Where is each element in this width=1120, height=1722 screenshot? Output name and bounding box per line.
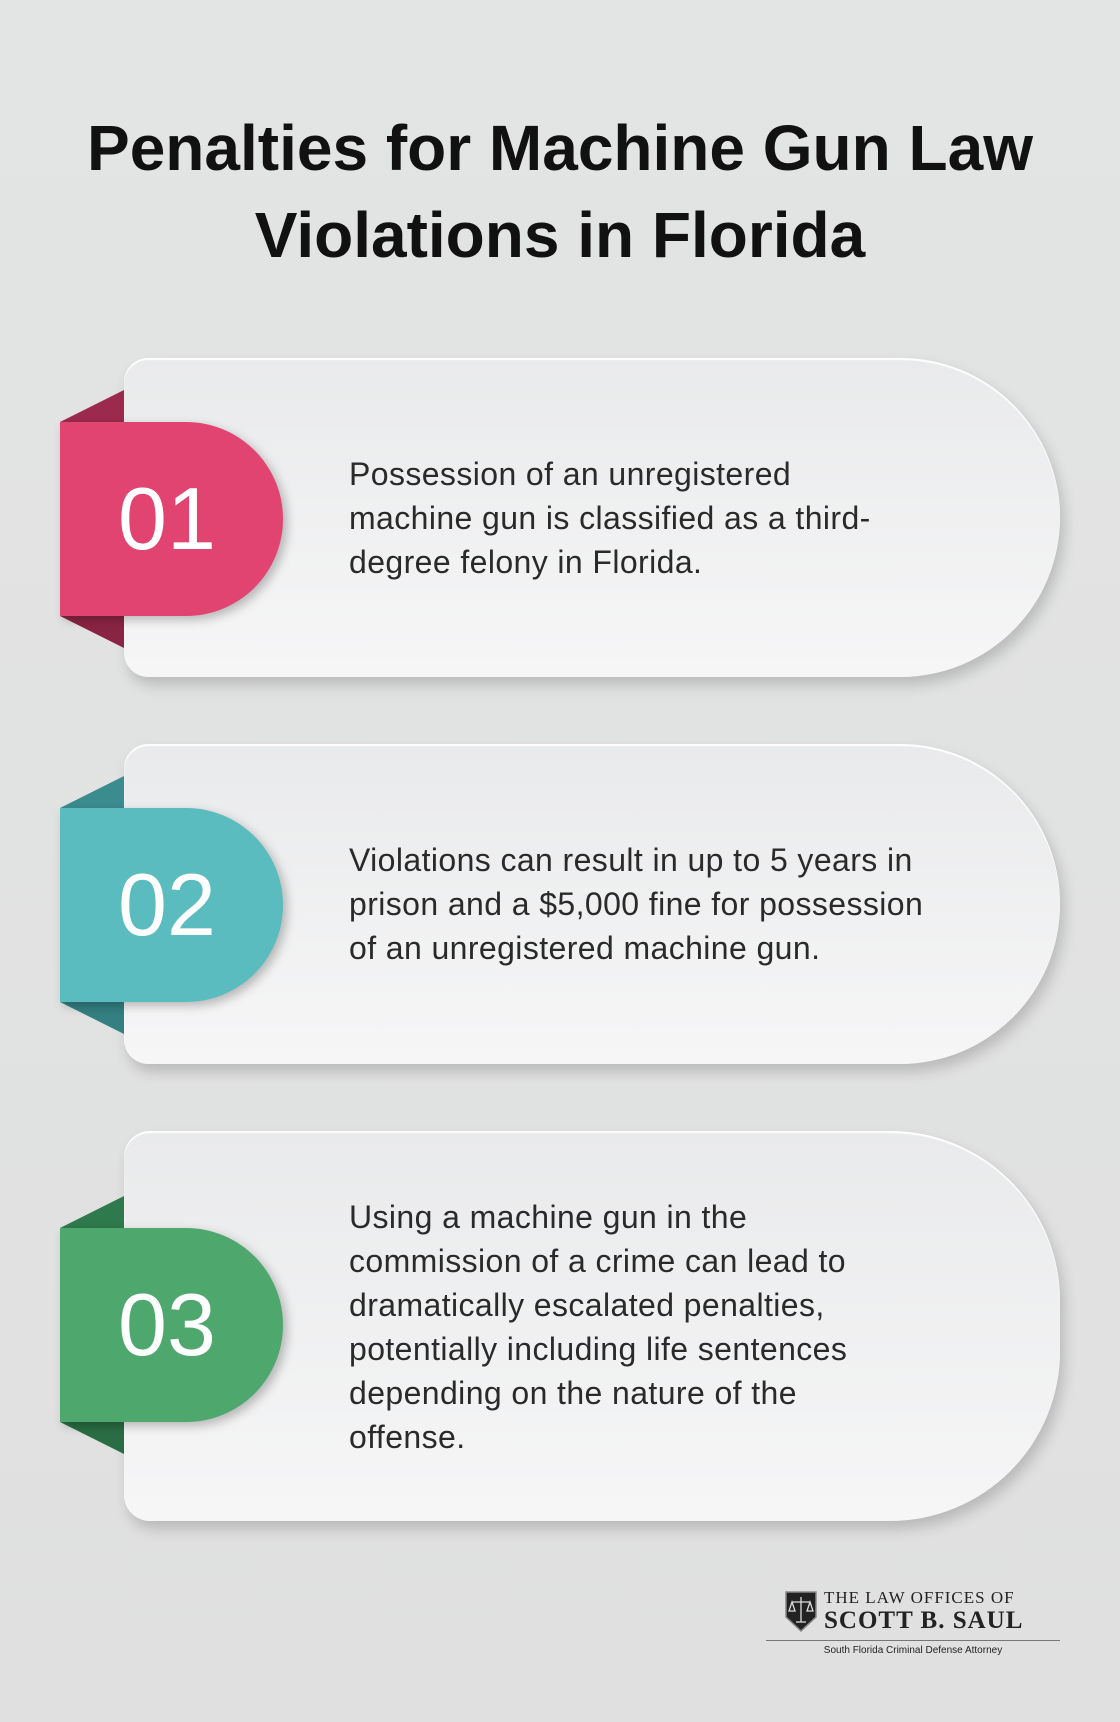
text 2: Violations can result in up to 5 years in [349, 842, 913, 878]
logo [766, 1588, 1060, 1656]
text 3: depending on the nature of the [349, 1375, 797, 1411]
title [87, 112, 1034, 271]
tab 03 [60, 1228, 283, 1422]
text 3: potentially including life sentences [349, 1331, 847, 1367]
logo text: THE LAW OFFICES OF [824, 1588, 1015, 1607]
text 3: offense. [349, 1419, 465, 1455]
card 1 [124, 358, 1060, 677]
tagline: South Florida Criminal Defense Attorney [824, 1645, 1002, 1656]
text 2: prison and a $5,000 fine for possession [349, 886, 923, 922]
tab 02: 02 [118, 855, 216, 954]
fold 1 [60, 390, 124, 648]
logo text: SCOTT B. SAUL [824, 1607, 1023, 1634]
tab 02 [60, 808, 283, 1002]
text 1: machine gun is classified as a third- [349, 500, 871, 536]
tab 01: 01 [118, 469, 216, 568]
text 3: commission of a crime can lead to [349, 1243, 846, 1279]
card 2 [124, 744, 1060, 1064]
icon: shield scales [785, 1591, 817, 1632]
text 3 [349, 1199, 847, 1455]
title: Violations in Florida [255, 199, 865, 271]
text 2 [349, 842, 923, 966]
panel: item 2 [59, 744, 1070, 1078]
logo text [824, 1588, 1023, 1634]
card 3 [124, 1131, 1060, 1521]
text 3: dramatically escalated penalties, [349, 1287, 825, 1323]
fold 2 [60, 776, 124, 1034]
text 3: Using a machine gun in the [349, 1199, 747, 1235]
text 1: Possession of an unregistered [349, 456, 791, 492]
tab 01 [60, 422, 283, 616]
text 2: of an unregistered machine gun. [349, 930, 820, 966]
title: Penalties for Machine Gun Law [87, 112, 1033, 184]
fold 3 [60, 1196, 124, 1454]
panel: item 1 [59, 358, 1070, 690]
text 1: degree felony in Florida. [349, 544, 702, 580]
panel: item 3 [59, 1131, 1070, 1534]
text 1 [349, 456, 871, 580]
tab 03: 03 [118, 1275, 216, 1374]
